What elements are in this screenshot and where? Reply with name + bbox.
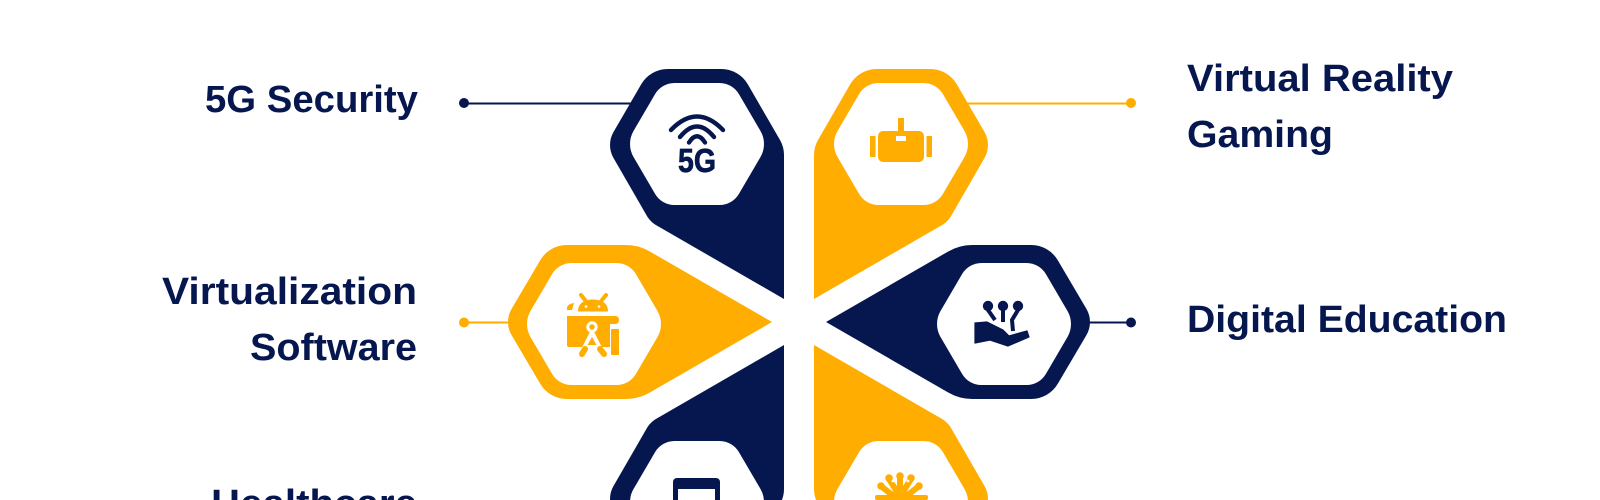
connector: 5G Security [459,98,632,108]
icon: 5G signal: 5G [678,142,716,179]
icon: branching tree network [875,472,928,500]
label: Virtual Reality Gaming: Virtual Reality [1187,58,1453,100]
label: Virtualization Software [162,271,417,369]
panel: Digital Education hexagon [826,245,1090,399]
panel: Healthcare hexagon [610,345,784,500]
icon: Android design tools [567,295,619,355]
label: Virtualization Software: Software [250,327,417,369]
icon: VR headset [870,118,932,162]
label: Virtual Reality Gaming [1187,58,1453,156]
panel: Virtual Reality Gaming hexagon [814,69,988,299]
connector: Virtualization Software [459,318,510,328]
panel: bottom right hexagon [814,345,988,500]
icon: hand with nodes [975,301,1029,346]
label: 5G Security: 5G Security [205,79,418,121]
icon: medical tablet [673,478,720,500]
panel: 5G Security hexagon [610,69,784,299]
label: Virtualization Software: Virtualization [162,271,417,313]
icon: 5G signal [671,116,723,179]
connector: Digital Education [1088,318,1136,328]
connector: Virtual Reality Gaming [966,98,1136,108]
panel: Virtualization Software hexagon [508,245,772,399]
label: Digital Education: Digital Education [1187,299,1507,341]
label: Virtual Reality Gaming: Gaming [1187,114,1333,156]
